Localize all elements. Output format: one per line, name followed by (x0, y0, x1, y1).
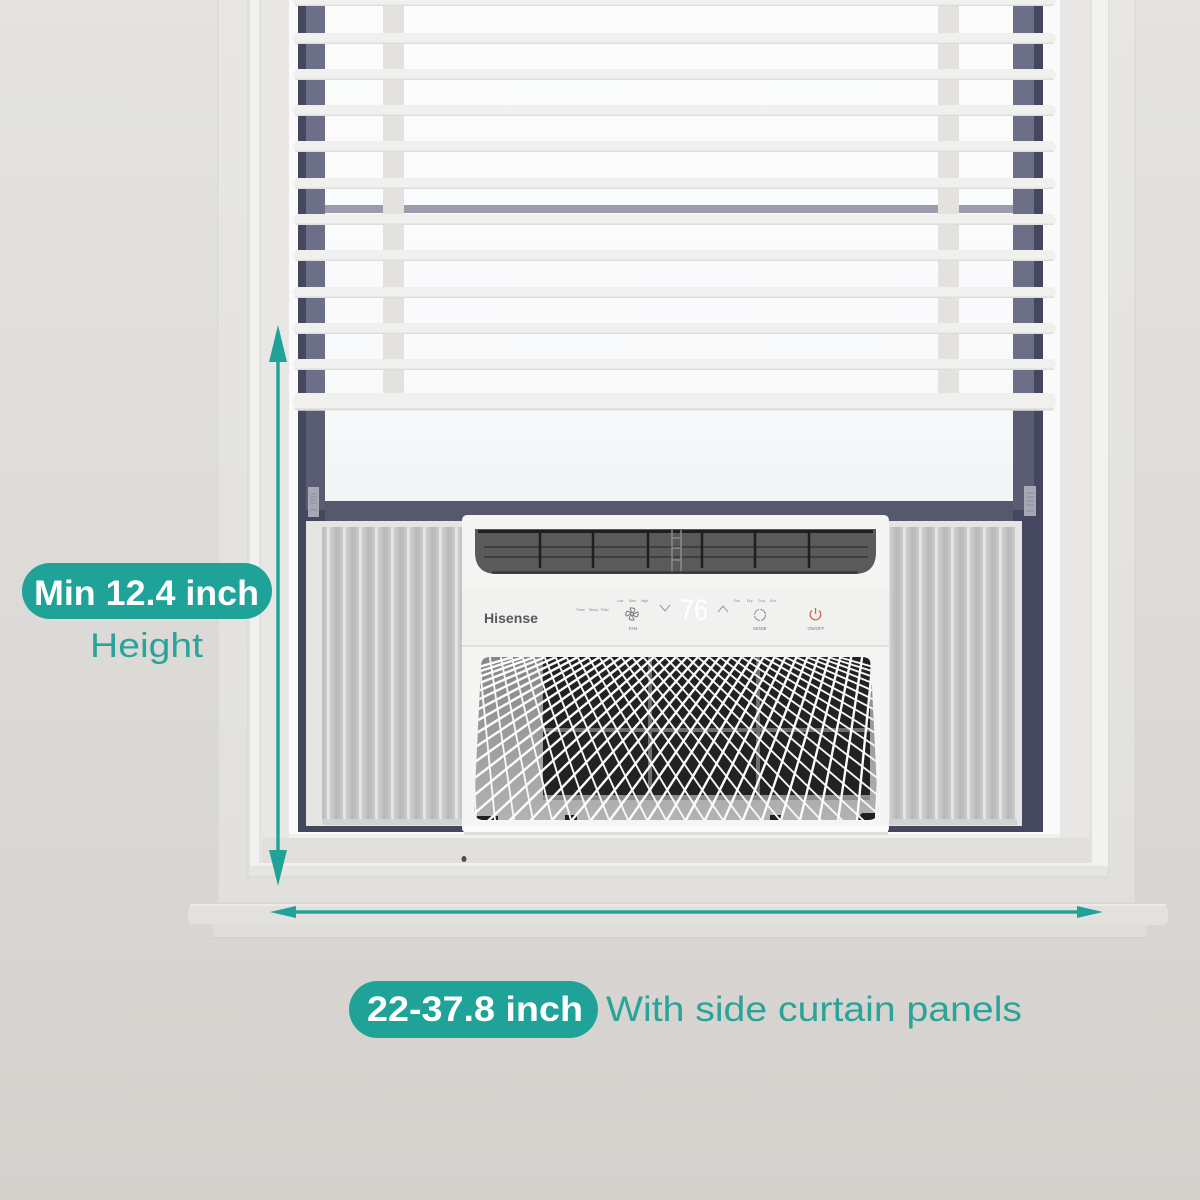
window trim (218, 0, 1135, 903)
control panel (576, 594, 825, 631)
width callout (349, 981, 1022, 1038)
width arrow (270, 906, 1103, 918)
window frame and glass (298, 0, 1043, 832)
top air vent (475, 529, 876, 574)
control panel: Filter (601, 608, 610, 612)
control panel: Fan (734, 599, 740, 603)
screw mark (462, 856, 466, 862)
height pill (22, 563, 272, 619)
height label: Height (90, 627, 204, 665)
window latch: left (308, 487, 319, 517)
brand logo: Hisense (484, 611, 539, 626)
unit body (462, 515, 889, 833)
icon: mode (754, 610, 766, 620)
control panel: Cool (758, 599, 765, 603)
window latch: right (1024, 486, 1036, 516)
control panel: Med (629, 599, 636, 603)
air conditioner (462, 515, 889, 835)
height arrow (269, 325, 287, 886)
control panel: ON/OFF (808, 626, 825, 631)
control panel: Low (617, 599, 624, 603)
icon: power (810, 608, 821, 620)
side curtain panel: right (885, 521, 1022, 826)
control panel: MODE (753, 626, 767, 631)
blind ladder tapes (383, 0, 959, 396)
width label: With side curtain panels (606, 990, 1022, 1029)
control panel: FAN (629, 626, 637, 631)
height callout (22, 563, 272, 665)
front intake grille (474, 657, 878, 820)
icon: fan (626, 608, 638, 620)
control panel: Eco (770, 599, 776, 603)
control panel: Timer (576, 608, 586, 612)
window sill (188, 904, 1168, 939)
control panel: High (641, 599, 648, 603)
control panel: Dry (747, 599, 753, 603)
width value: 22-37.8 inch (367, 990, 583, 1029)
width pill (349, 981, 598, 1038)
temperature display: 76 (680, 594, 708, 627)
side curtain panel: left (306, 521, 465, 826)
window blinds (292, 0, 1057, 411)
control panel: Sleep (589, 608, 598, 612)
height value: Min 12.4 inch (34, 574, 259, 613)
